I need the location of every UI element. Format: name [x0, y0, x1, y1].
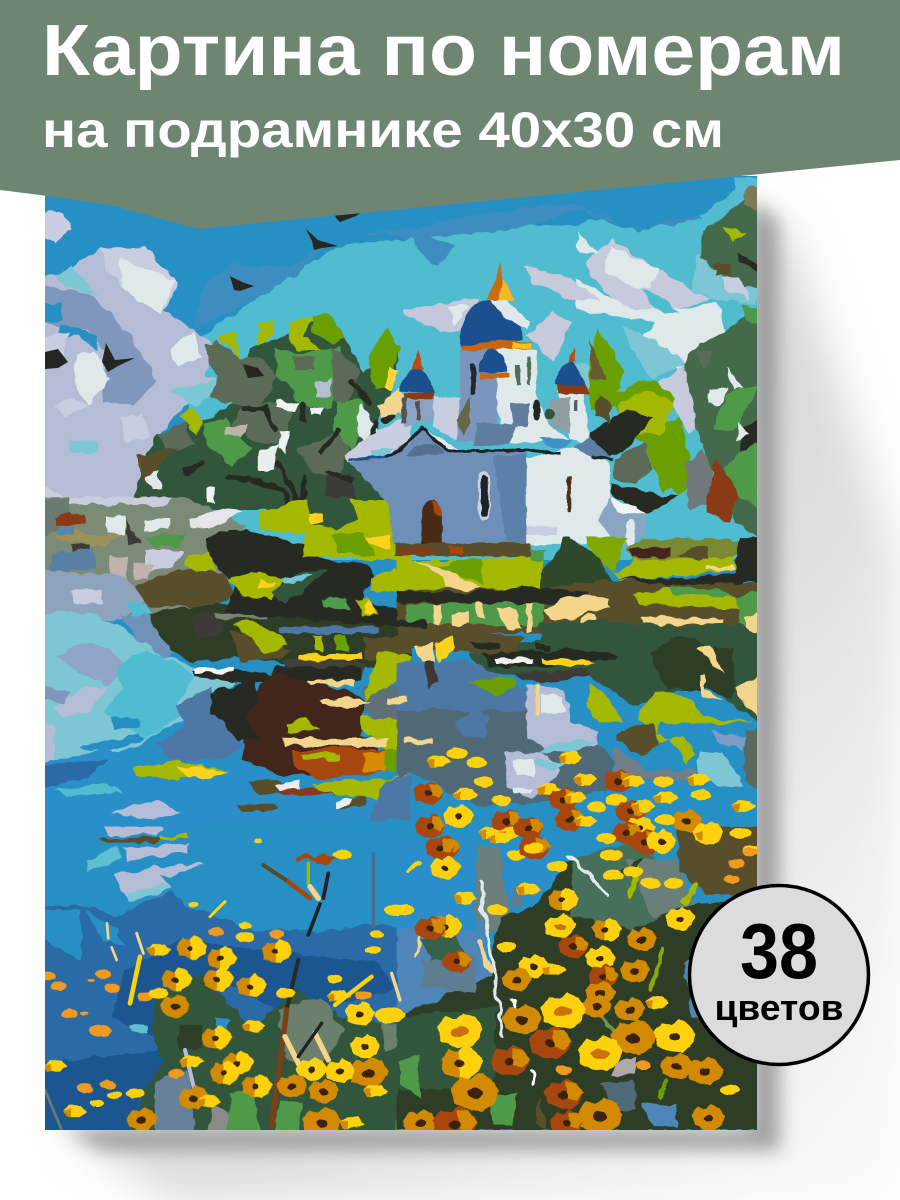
foreground shrubs and water at bottom left	[42, 827, 408, 1137]
stems	[407, 857, 697, 1097]
flower cluster left	[40, 839, 405, 1138]
church body	[348, 428, 527, 545]
blue lake below	[45, 750, 112, 766]
badge: 38 colours: 38	[740, 907, 818, 995]
title: Картина по номерам	[42, 11, 845, 91]
birds	[45, 208, 368, 378]
water greens	[467, 620, 763, 727]
flower cluster right	[393, 828, 758, 1142]
light lake	[42, 612, 238, 767]
branches and twigs	[45, 853, 400, 1130]
ground mix	[128, 973, 408, 1137]
far right trees	[588, 186, 767, 543]
bright ripples	[193, 667, 233, 674]
dark band	[397, 580, 767, 640]
badge: 38 colours	[690, 886, 868, 1064]
brown reflection	[285, 657, 365, 680]
painting: church by the river	[40, 170, 770, 1142]
upper blue	[358, 182, 736, 244]
header banner	[0, 0, 900, 229]
church	[348, 262, 647, 557]
subtitle: на подрамнике 40х30 см	[42, 102, 724, 158]
annex	[598, 497, 647, 547]
flowers	[40, 748, 762, 1142]
big tree	[132, 313, 412, 510]
foreground of church, meadow and reflections	[397, 537, 767, 807]
left cloud in crop coords	[42, 212, 218, 510]
red sprig on the water	[295, 850, 352, 865]
sky and clouds	[42, 170, 770, 560]
meadow	[397, 543, 530, 557]
lavender church yard	[345, 417, 412, 460]
branches	[185, 382, 395, 507]
lavender and teal cloud reflection	[102, 827, 165, 835]
right cloud in crop coords	[527, 233, 757, 436]
far shore	[42, 497, 245, 617]
flowers near the water	[413, 748, 762, 860]
far bank and lake in crop coords	[42, 497, 412, 833]
upper dark mound	[135, 570, 235, 607]
church reflection	[397, 660, 527, 717]
drums and domes	[348, 262, 590, 458]
right shore greens	[587, 683, 623, 723]
right foreground meadow	[397, 827, 763, 1130]
teal sky	[190, 176, 770, 560]
shadow bank	[155, 687, 242, 760]
white blossoms	[278, 400, 298, 412]
badge: 38 colours: цветов	[714, 987, 844, 1028]
canvas drop shadow	[60, 200, 900, 1200]
